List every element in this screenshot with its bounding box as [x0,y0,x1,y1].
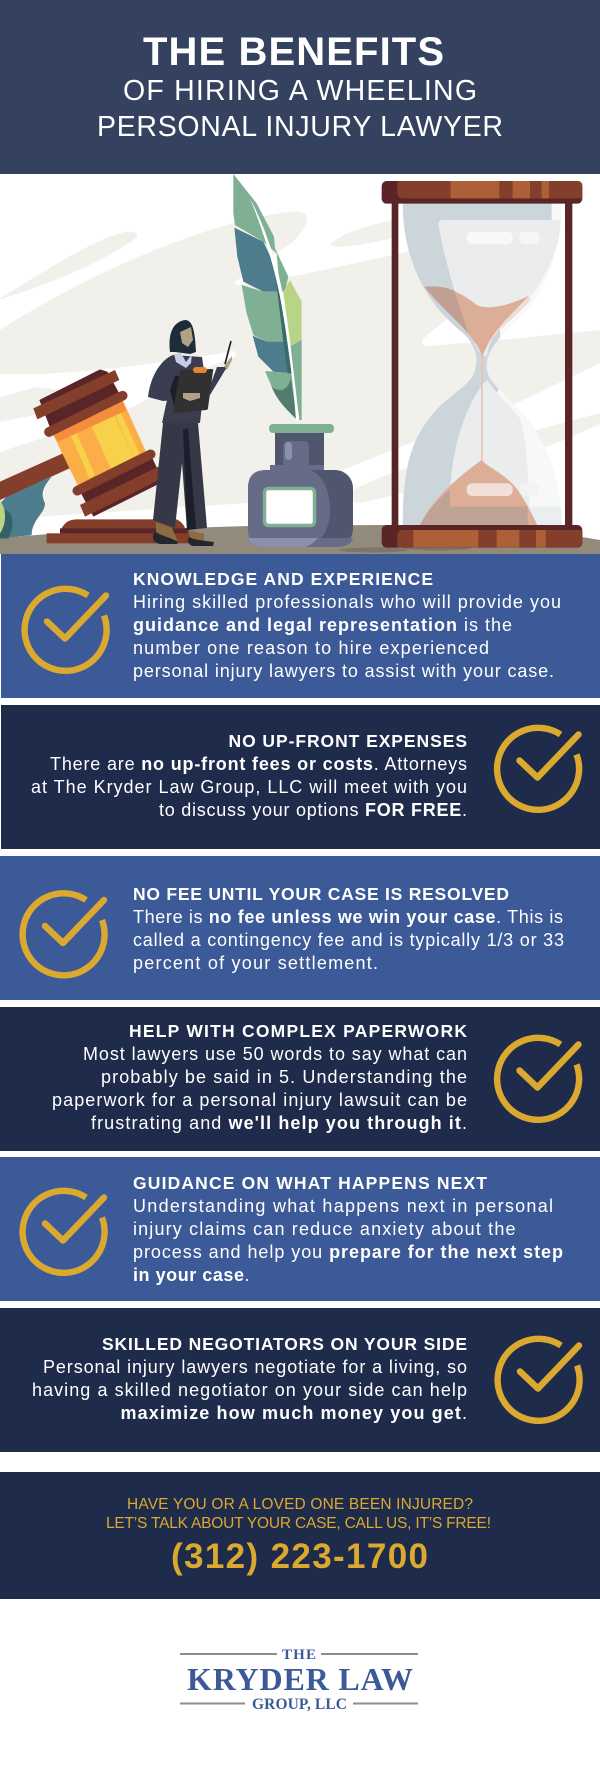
text: paperwork: frustrating and we'll help you through it. [91,1113,467,1133]
text: negotiators: Personal injury lawyers negotiate for a living, so [43,1357,467,1377]
panel: skilled negotiators [0,1308,600,1452]
shoes [156,522,178,542]
text: no fee [133,884,564,973]
panel: knowledge and experience [1,554,600,698]
text: knowledge: KNOWLEDGE AND EXPERIENCE [133,569,433,589]
text: guidance: injury claims can reduce anxiety about the [133,1219,516,1239]
ground [0,525,600,554]
clipboard [173,369,213,413]
panel: what happens next [0,1157,600,1301]
text: paperwork: HELP WITH COMPLEX PAPERWORK [129,1021,467,1041]
call to action panel [0,1472,600,1599]
top bar [382,181,582,204]
logo: The Kryder Law Group: KRYDER LAW [187,1661,413,1697]
white gaps between swooshes [0,351,236,452]
panel: no up-front expenses [1,705,600,849]
hair [170,320,196,354]
logo: The Kryder Law Group: THE [282,1647,316,1663]
text: guidance: Understanding what happens next in personal [133,1196,553,1216]
text: paperwork [52,1021,467,1133]
text: knowledge: number one reason to hire experienced [133,638,489,658]
logo: The Kryder Law Group [180,1647,418,1713]
text: expenses: at The Kryder Law Group, LLC will meet with you [31,777,467,797]
text: knowledge: Hiring skilled professionals who will provide you [133,592,561,612]
text: expenses: There are no up-front fees or costs. Attorneys [50,754,467,774]
text: expenses: to discuss your options FOR FREE. [159,800,467,820]
glass highlights [438,220,562,357]
text: paperwork: paperwork for a personal injury lawsuit can be [52,1090,467,1110]
glass [400,203,563,525]
text: guidance: process and help you prepare for the next step [133,1242,563,1262]
text: no fee: percent of your settlement. [133,953,378,973]
sand stream [479,355,484,463]
text: guidance [133,1173,563,1285]
icon: check circle [497,1038,579,1120]
sand bottom [420,460,537,525]
pants [153,423,207,530]
icon: lawyer with clipboard [148,320,232,546]
icon: ink bottle [248,424,353,547]
text: guidance: in your case. [133,1265,250,1285]
text: knowledge: personal injury lawyers to assist with your case. [133,661,554,681]
text: no fee: NO FEE UNTIL YOUR CASE IS RESOLVED [133,884,509,904]
text: negotiators: having a skilled negotiator on your side can help [32,1380,467,1400]
jacket [162,355,205,423]
text: knowledge [133,569,561,681]
pen [225,341,231,364]
title: PERSONAL INJURY LAWYER [97,111,503,143]
pill highlights [467,232,513,244]
logo: The Kryder Law Group: GROUP, LLC [252,1696,347,1713]
text: negotiators: SKILLED NEGOTIATORS ON YOUR SIDE [102,1334,467,1354]
bottom bar [382,525,582,548]
icon: check circle [23,893,105,975]
panel: no fee until resolved [0,856,600,1000]
text: negotiators [32,1334,467,1423]
text: expenses [31,731,467,820]
title [97,30,503,143]
icon: plant [0,477,52,538]
text: no fee: There is no fee unless we win your case. This is [133,907,563,927]
icon: gavel [0,369,203,543]
icon: check circle [497,728,579,810]
call to action text: HAVE YOU OR A LOVED ONE BEEN INJURED? [127,1496,473,1513]
title: THE BENEFITS [143,30,444,74]
icon: check circle [23,1191,105,1273]
posts [392,202,398,527]
icon: check circle [25,589,107,671]
text: knowledge: guidance and legal representation is the [133,615,512,635]
text: guidance: GUIDANCE ON WHAT HAPPENS NEXT [133,1173,487,1193]
call to action panel: LET’S TALK ABOUT YOUR CASE, CALL US, IT’S FREE! [106,1515,491,1532]
panel: complex paperwork [0,1007,600,1151]
text: paperwork: probably be said in 5. Understanding the [101,1067,467,1087]
text: paperwork: Most lawyers use 50 words to say what can [83,1044,467,1064]
title: OF HIRING A WHEELING [123,75,477,107]
text: negotiators: maximize how much money you get. [120,1403,467,1423]
text: expenses: NO UP-FRONT EXPENSES [228,731,467,751]
illustration scene [0,174,600,554]
text: no fee: called a contingency fee and is typically 1/3 or 33 [133,930,564,950]
header banner [0,0,600,174]
background swooshes [0,212,600,517]
icon: quill feather [233,174,302,420]
bottle label [264,488,314,526]
hands [183,393,200,401]
icon: check circle [498,1339,580,1421]
face [180,327,193,347]
icon: hourglass [382,181,582,548]
sand top [488,296,531,343]
phone number: (312) 223-1700 [171,1537,428,1576]
collar [174,353,192,368]
